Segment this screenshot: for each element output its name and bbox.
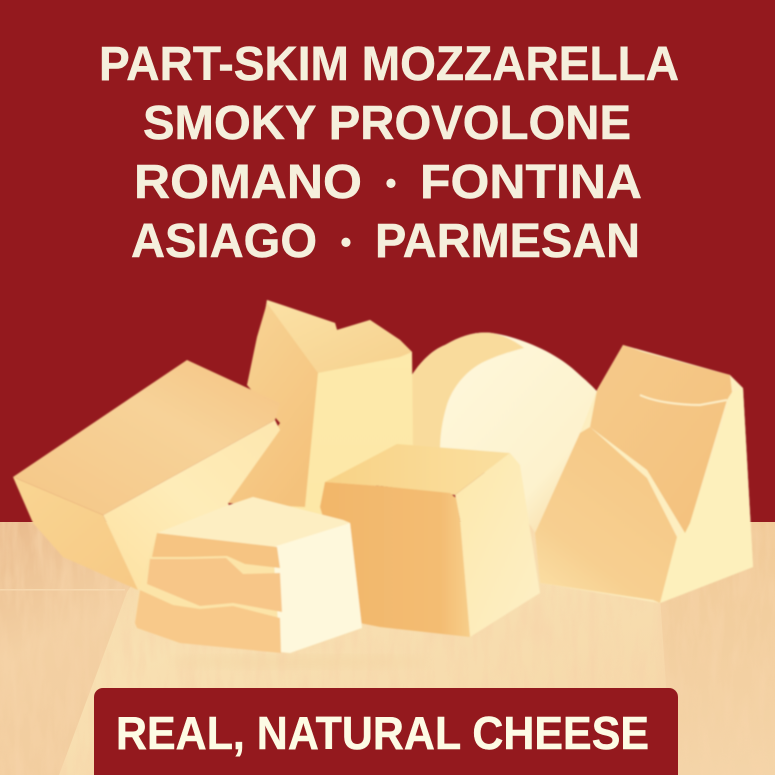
cheese: cube front centre: [320, 444, 540, 637]
line 4: [131, 215, 640, 268]
line 2: SMOKY PROVOLONE: [143, 97, 631, 150]
cheese: layered block front left: [135, 497, 362, 653]
wooden table surface: [0, 522, 775, 775]
banner: [94, 688, 678, 775]
line 3: [134, 156, 642, 209]
line 3: •: [385, 165, 397, 201]
line 3: FONTINA: [420, 156, 642, 209]
line 4: ASIAGO: [131, 215, 317, 268]
cheese: round mozzarella back right: [410, 332, 600, 540]
cheese: cut block back centre: [225, 300, 413, 530]
crack lines: [640, 395, 727, 405]
cheese group: [13, 300, 753, 653]
line 4: PARMESAN: [375, 215, 640, 268]
cheese: wedge right: [535, 345, 753, 603]
line 4: •: [340, 224, 352, 260]
cheese: large wedge left: [13, 360, 280, 590]
heading: cheese list: [99, 38, 679, 268]
banner text: REAL, NATURAL CHEESE: [116, 707, 649, 759]
line 3: ROMANO: [134, 156, 362, 209]
line 1: PART-SKIM MOZZARELLA: [99, 38, 679, 91]
